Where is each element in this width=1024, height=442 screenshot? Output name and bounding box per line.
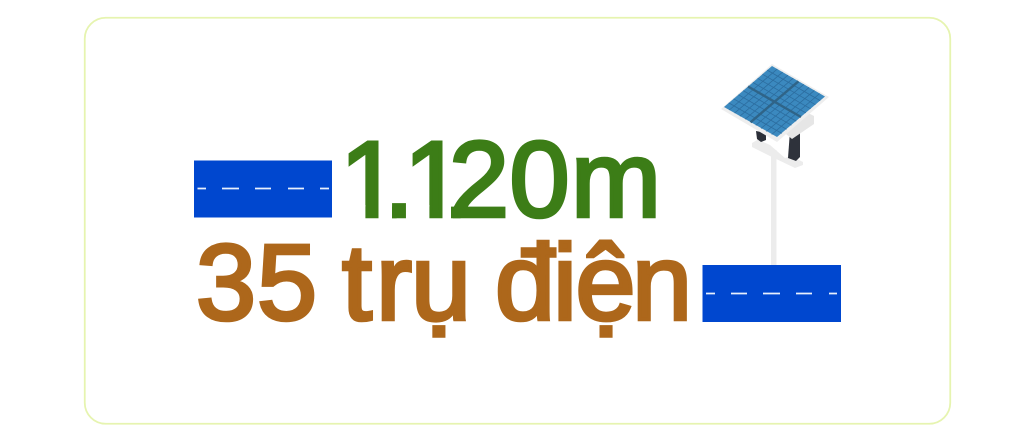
icon: left road <box>194 160 332 218</box>
icon: right road <box>702 265 841 322</box>
heading: road length: 1.120m <box>340 118 661 240</box>
cross arm <box>752 140 803 168</box>
panel: card outline <box>85 18 950 424</box>
icon: solar street light <box>721 64 829 265</box>
panel cell lines <box>729 69 820 134</box>
panel mount <box>786 112 814 139</box>
left bracket <box>756 131 766 142</box>
solar panel surface <box>724 66 825 137</box>
panel dividers <box>748 81 801 122</box>
right post <box>788 131 800 161</box>
heading: number of poles: 35 trụ điện <box>196 222 692 342</box>
panel frame <box>721 64 829 142</box>
pole <box>771 150 776 265</box>
